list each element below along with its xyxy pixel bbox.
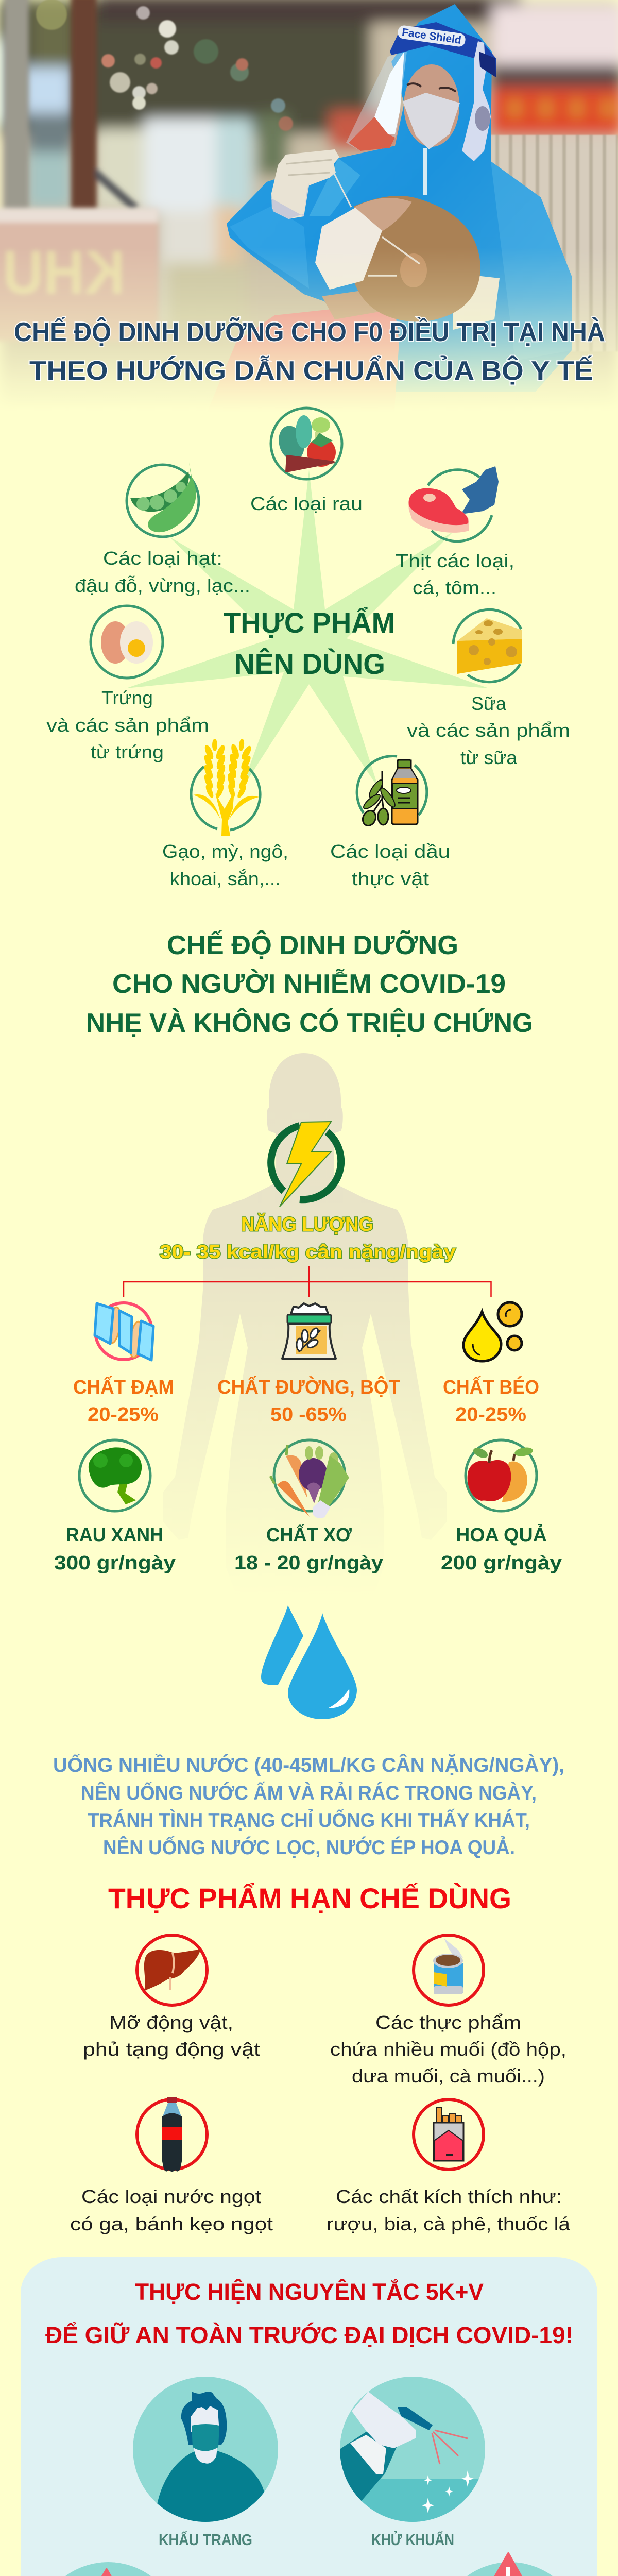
- label: Các loại hạt:: [103, 548, 222, 569]
- blurred fence: [479, 135, 618, 351]
- icon: fat droplets: [464, 1302, 522, 1361]
- icon: vegetables: [271, 408, 342, 479]
- label: 50 -65%: [270, 1404, 347, 1426]
- tree trunk and post: [4, 0, 139, 210]
- label: thực vật: [352, 868, 429, 889]
- label: [73, 1376, 174, 1426]
- label: [54, 1524, 176, 1574]
- label: Các loại rau: [250, 493, 363, 514]
- panel: recommended foods star diagram: [46, 408, 570, 889]
- icon: cigarette pack: [414, 2099, 484, 2170]
- label: dưa muối, cà muối...): [352, 2065, 545, 2087]
- energy text: 30- 35 kcal/kg cân nặng/ngày: [160, 1241, 456, 1262]
- icon: cheese: [453, 609, 522, 682]
- label: Trứng: [101, 687, 153, 708]
- label: [70, 2186, 273, 2234]
- icon: canned food: [414, 1935, 484, 2005]
- label: [83, 2012, 260, 2060]
- icon: grain sack: [282, 1303, 336, 1359]
- icon: soft drink bottle: [137, 2097, 207, 2172]
- label: HOA QUẢ: [456, 1523, 547, 1546]
- label: có ga, bánh kẹo ngọt: [70, 2213, 273, 2234]
- energy text: NĂNG LƯỢNG: [241, 1213, 373, 1235]
- label: [396, 550, 514, 598]
- patient with mask, head tilted back: [219, 196, 500, 392]
- icon: no gathering: [468, 2562, 552, 2576]
- label: KHẨU TRANG: [159, 2531, 252, 2549]
- icon: disinfectant spray: [340, 2377, 485, 2522]
- label: Gạo, mỳ, ngô,: [162, 841, 288, 862]
- star heading: [224, 606, 395, 680]
- water advice text: UỐNG NHIỀU NƯỚC (40-45ML/KG CÂN NẶNG/NGÀY),: [53, 1753, 564, 1776]
- label: khoai, sắn,...: [170, 868, 281, 889]
- water advice text: NÊN UỐNG NƯỚC LỌC, NƯỚC ÉP HOA QUẢ.: [103, 1836, 515, 1859]
- human silhouette: [163, 1053, 447, 1597]
- water advice text: NÊN UỐNG NƯỚC ẤM VÀ RẢI RÁC TRONG NGÀY,: [81, 1781, 537, 1804]
- icon: cooking oil: [357, 756, 427, 828]
- icon: energy bolt: [271, 1122, 341, 1207]
- label: [46, 687, 209, 762]
- label: và các sản phẩm: [407, 720, 570, 741]
- panel heading: [45, 2279, 573, 2348]
- panel heading: ĐỂ GIỮ AN TOÀN TRƯỚC ĐẠI DỊCH COVID-19!: [45, 2322, 573, 2348]
- suit zipper: [423, 148, 427, 195]
- icon: broccoli: [79, 1440, 150, 1511]
- label: 200 gr/ngày: [441, 1552, 562, 1574]
- label: rượu, bia, cà phê, thuốc lá: [327, 2213, 571, 2234]
- icon: eggs: [91, 606, 163, 678]
- star heading: NÊN DÙNG: [234, 648, 385, 680]
- label: CHẤT XƠ: [266, 1523, 352, 1546]
- heading: nutrition for mild covid: [86, 930, 533, 1038]
- energy text: [160, 1213, 456, 1262]
- label: [327, 2186, 571, 2234]
- label: từ trứng: [91, 741, 164, 762]
- label: Mỡ động vật,: [109, 2012, 233, 2033]
- panel: 5K+V rules: [21, 2257, 597, 2576]
- label: Các chất kích thích như:: [336, 2186, 562, 2207]
- label: Thịt các loại,: [396, 550, 514, 571]
- title: [14, 317, 605, 386]
- shield label: Face Shield: [401, 26, 462, 46]
- label: [75, 548, 250, 596]
- icon: liver: [137, 1935, 207, 2005]
- label: [162, 841, 288, 889]
- heading: nutrition for mild covid: CHO NGƯỜI NHIỄM COVID-19: [112, 969, 506, 999]
- star heading: THỰC PHẨM: [224, 606, 395, 639]
- label: KHỬ KHUẨN: [371, 2530, 454, 2549]
- face opening and mask: [404, 64, 459, 147]
- icon: fruit: [466, 1440, 537, 1511]
- gloved hand holding swab: [271, 149, 339, 219]
- icon: warning triangle: [84, 2569, 128, 2576]
- label: [234, 1523, 383, 1574]
- label: CHẤT ĐẠM: [73, 1376, 174, 1398]
- label: Sữa: [471, 693, 507, 714]
- label: đậu đỗ, vừng, lạc...: [75, 575, 250, 596]
- water advice text: TRÁNH TÌNH TRẠNG CHỈ UỐNG KHI THẤY KHÁT,: [88, 1808, 530, 1832]
- label: 20-25%: [88, 1404, 159, 1426]
- label: [441, 1523, 562, 1574]
- water advice text: [53, 1753, 564, 1859]
- label: Các loại dầu: [330, 841, 450, 862]
- icon: fibre vegetables: [270, 1440, 349, 1518]
- label: Các thực phẩm: [375, 2012, 521, 2033]
- hero photo: health worker taking a nasal swab: [0, 0, 618, 417]
- label: RAU XANH: [66, 1524, 163, 1546]
- label: [330, 2012, 566, 2087]
- label: cá, tôm...: [413, 577, 496, 598]
- bokeh highlights in foliage: [36, 0, 293, 131]
- label: [443, 1376, 539, 1426]
- hero fade into background: [0, 247, 618, 412]
- label: CHẤT BÉO: [443, 1376, 539, 1398]
- blurred street background: [0, 0, 618, 412]
- label: từ sữa: [460, 747, 518, 768]
- icon: face mask person: [133, 2377, 278, 2524]
- red connector lines: [124, 1266, 491, 1297]
- icon: meat and fish: [408, 466, 499, 541]
- icon: warning triangle: [486, 2553, 530, 2576]
- icon: protein: [95, 1303, 153, 1360]
- label: [407, 693, 570, 768]
- label: 18 - 20 gr/ngày: [234, 1552, 383, 1574]
- label: 20-25%: [455, 1404, 526, 1426]
- face shield: [390, 22, 496, 77]
- star background shape: [126, 470, 489, 791]
- label: [330, 841, 450, 889]
- label: 300 gr/ngày: [54, 1552, 176, 1574]
- icon: keep distance: [65, 2562, 150, 2576]
- label: [217, 1375, 400, 1426]
- health worker in blue protective suit: [227, 4, 572, 392]
- heading: nutrition for mild covid: CHẾ ĐỘ DINH DƯỠNG: [167, 930, 458, 960]
- panel heading: THỰC HIỆN NGUYÊN TẮC 5K+V: [135, 2279, 484, 2305]
- heading: limited foods: THỰC PHẨM HẠN CHẾ DÙNG: [108, 1882, 511, 1914]
- icon: legumes: [127, 462, 199, 537]
- shield strap: [462, 41, 491, 161]
- label: phủ tạng động vật: [83, 2039, 260, 2060]
- heading: nutrition for mild covid: NHẸ VÀ KHÔNG CÓ TRIỆU CHỨNG: [86, 1008, 533, 1038]
- label: CHẤT ĐƯỜNG, BỘT: [217, 1375, 400, 1398]
- label: Các loại nước ngọt: [81, 2186, 261, 2207]
- icon: wheat: [191, 738, 260, 836]
- label: chứa nhiều muối (đồ hộp,: [330, 2039, 566, 2060]
- title: THEO HƯỚNG DẪN CHUẨN CỦA BỘ Y TẾ: [29, 355, 593, 386]
- icon: water drops: [261, 1605, 357, 1719]
- blurred sign box: [0, 208, 158, 341]
- label: và các sản phẩm: [46, 715, 209, 736]
